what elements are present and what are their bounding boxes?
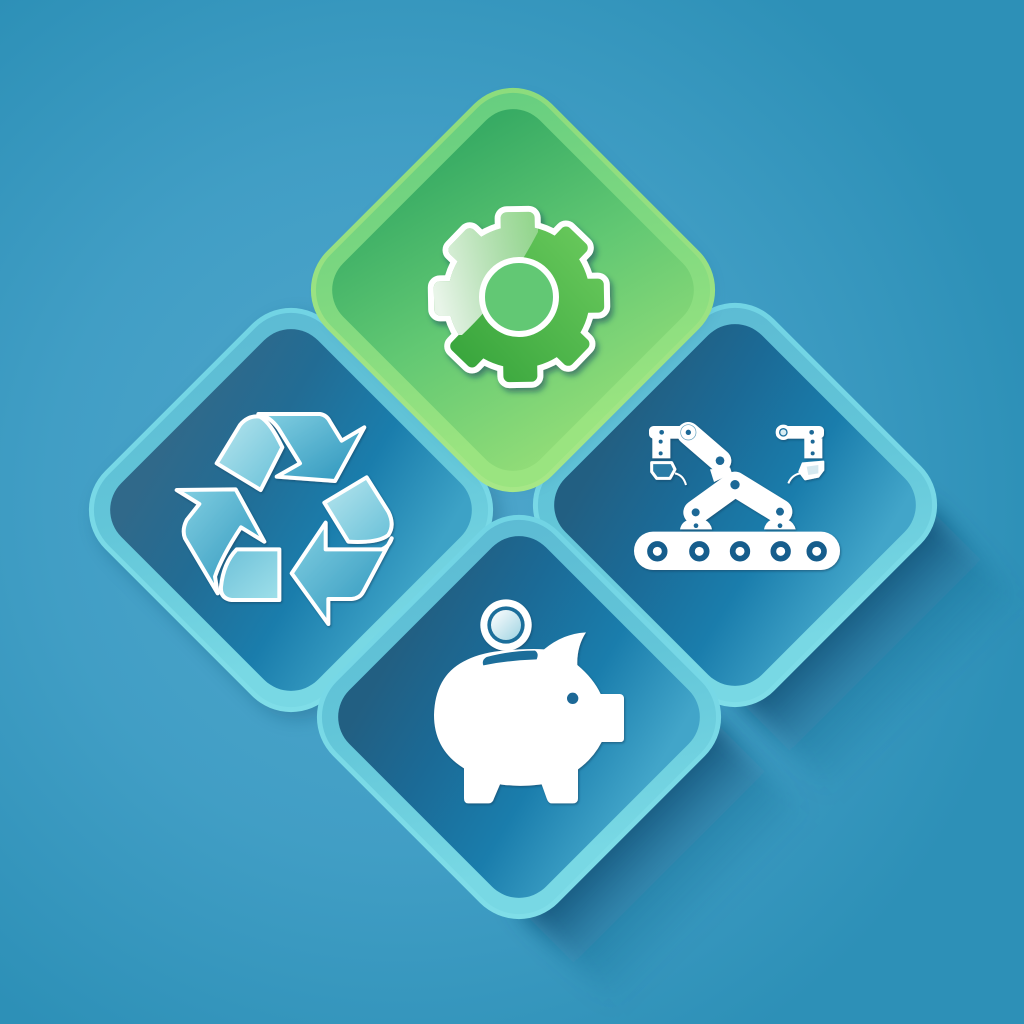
icon: piggy bank with coin [434, 599, 624, 803]
left robot arm [649, 425, 724, 485]
panel: recycling [66, 285, 516, 735]
panel: savings [294, 492, 744, 942]
icon: recycling arrows [177, 414, 392, 624]
central arm [680, 467, 796, 529]
panel: settings [310, 88, 716, 492]
icon: robot arms on conveyor [634, 425, 840, 570]
coin slot [483, 651, 538, 665]
conveyor belt [634, 532, 840, 570]
pig body [434, 632, 624, 803]
panel: automation [510, 280, 960, 730]
icon: gear [428, 206, 616, 396]
right robot arm [776, 425, 824, 483]
coin [480, 599, 532, 651]
eye [567, 693, 578, 704]
cast shadows [73, 292, 1024, 1006]
